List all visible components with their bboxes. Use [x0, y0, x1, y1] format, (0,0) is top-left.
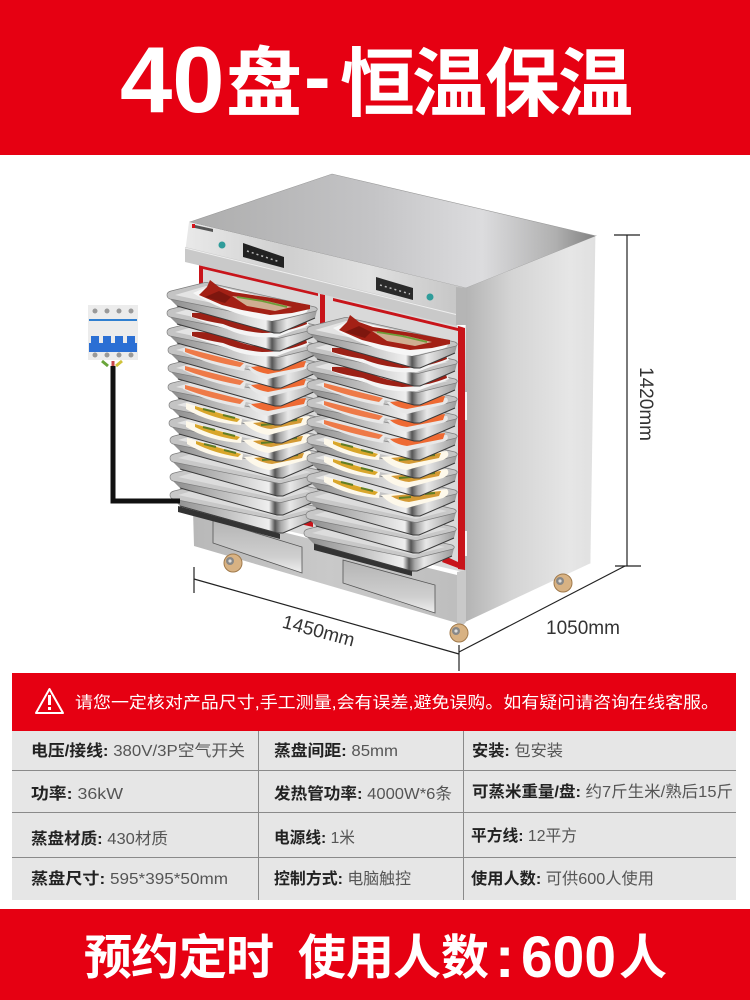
right display [376, 277, 413, 300]
width dimension [194, 567, 459, 671]
row 3: 平方线: 12平方 [471, 826, 577, 845]
width label: 1450mm [280, 612, 357, 651]
door hinge [465, 392, 467, 420]
caster front [450, 624, 468, 642]
height label: 1420mm [635, 367, 656, 441]
row 1: 蒸盘间距: 85mm [274, 741, 398, 760]
right tray stack [304, 315, 457, 576]
row 4: 使用人数: 可供600人使用 [471, 870, 654, 888]
base [193, 510, 457, 623]
height dimension [614, 235, 641, 566]
bottom slogan: 使用人数 [298, 932, 489, 985]
row 3: 电源线: 1米 [274, 828, 355, 847]
bottom banner [0, 909, 750, 1000]
cabinet right side [463, 236, 596, 623]
power cable [113, 366, 180, 501]
row 2: 功率: 36kW [31, 784, 124, 803]
title: 恒温保温 [340, 42, 633, 126]
left tray stack [167, 280, 320, 539]
left drawer [213, 520, 302, 573]
circuit breaker [88, 305, 138, 366]
row 4 [31, 869, 654, 888]
title [120, 27, 633, 132]
row 2: 可蒸米重量/盘: 约7斤生米/熟后15斤 [472, 782, 733, 801]
title: 40 [120, 27, 225, 132]
right drawer [343, 560, 435, 613]
bottom slogan: 600 [521, 925, 616, 990]
notice text: 请您一定核对产品尺寸,手工测量,会有误差,避免误购。如有疑问请咨询在线客服。 [75, 693, 719, 712]
row 2 [31, 782, 733, 803]
row 1: 安装: 包安装 [472, 742, 563, 760]
row 1: 电压/接线: 380V/3P空气开关 [31, 741, 245, 760]
row 2: 发热管功率: 4000W*6条 [274, 784, 452, 803]
depth label: 1050mm [546, 618, 620, 639]
left indicator [218, 242, 226, 248]
row 3: 蒸盘材质: 430材质 [31, 829, 168, 848]
row 3 [31, 826, 577, 848]
title: 盘 [226, 42, 302, 127]
product illustration: steam cabinet [167, 174, 596, 642]
row 4: 蒸盘尺寸: 595*395*50mm [31, 869, 228, 888]
bottom slogan: : [495, 925, 514, 990]
red door frame [199, 264, 465, 570]
depth dimension [459, 566, 625, 652]
cabinet top surface [190, 174, 596, 288]
brand logo [192, 224, 213, 232]
caster left [224, 554, 242, 572]
bottom slogan: 预约定时 [84, 932, 274, 985]
specification table [12, 731, 736, 900]
row 4: 控制方式: 电脑触控 [274, 869, 411, 888]
top banner [0, 0, 750, 155]
bottom slogan: 人 [619, 932, 667, 985]
lower hinge [465, 531, 467, 556]
title: - [304, 32, 331, 121]
right indicator [426, 294, 434, 300]
interior opening [199, 262, 463, 572]
caster right [554, 574, 572, 592]
left display [243, 243, 284, 268]
row 1 [31, 741, 563, 760]
bottom slogan [84, 925, 667, 990]
icon: warning triangle [36, 689, 63, 713]
control panel [185, 222, 466, 325]
notice banner [12, 673, 736, 731]
